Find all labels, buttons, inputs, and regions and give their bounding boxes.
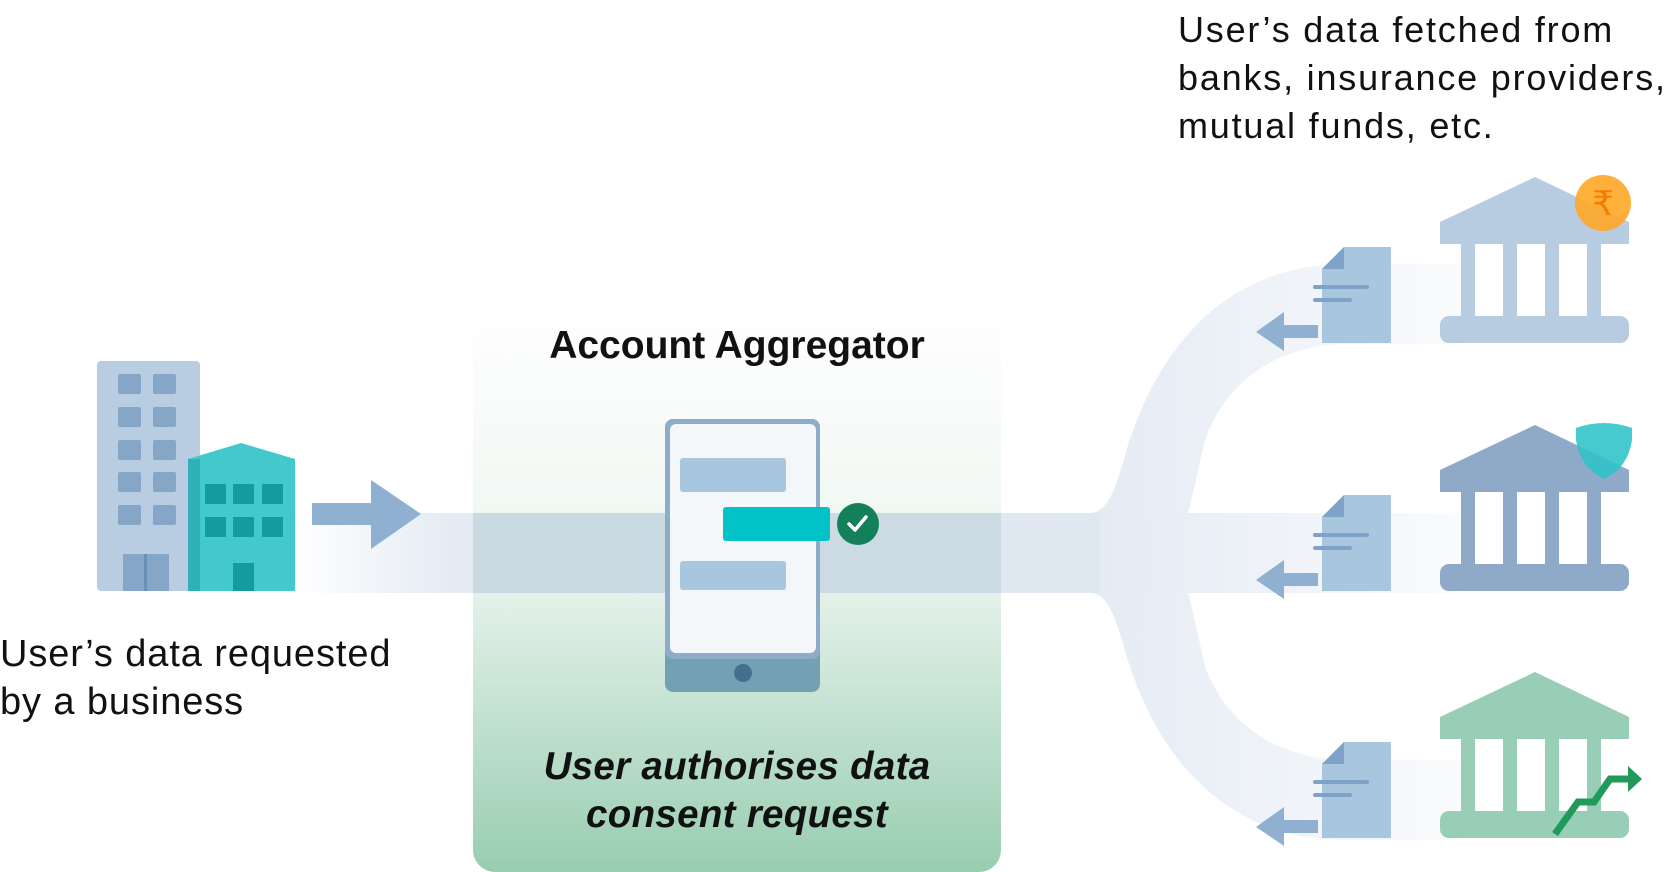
icon: shield xyxy=(1576,423,1632,479)
panel: account aggregator xyxy=(473,300,1001,872)
icon: check xyxy=(837,503,879,545)
arrow: to aggregator xyxy=(312,480,421,549)
bank 2 xyxy=(1440,423,1632,591)
text: fetched from providers: User’s data fetched from xyxy=(1178,9,1614,50)
text: requested by business xyxy=(0,633,391,723)
text: requested by business: User’s data requested xyxy=(0,633,391,675)
text: fetched from providers: banks, insurance providers, xyxy=(1178,57,1667,98)
data flow streams xyxy=(290,264,1460,840)
text: fetched from providers: mutual funds, etc. xyxy=(1178,105,1495,146)
text: user authorises consent xyxy=(544,745,930,836)
text: requested by business: by a business xyxy=(0,681,244,723)
icon: office buildings xyxy=(97,361,295,591)
bank 3 xyxy=(1440,672,1642,838)
icon: growth arrow xyxy=(1555,766,1642,834)
text: user authorises consent: consent request xyxy=(586,793,888,836)
text: user authorises consent: User authorises data xyxy=(544,745,930,788)
icon: phone xyxy=(665,419,879,692)
icon: rupee coin: ₹ xyxy=(1592,184,1614,224)
title: account aggregator: Account Aggregator xyxy=(549,324,925,367)
icon: rupee coin xyxy=(1575,175,1631,231)
documents and arrows xyxy=(1256,247,1391,846)
bank 1 xyxy=(1440,175,1631,343)
text: fetched from providers xyxy=(1178,9,1667,146)
